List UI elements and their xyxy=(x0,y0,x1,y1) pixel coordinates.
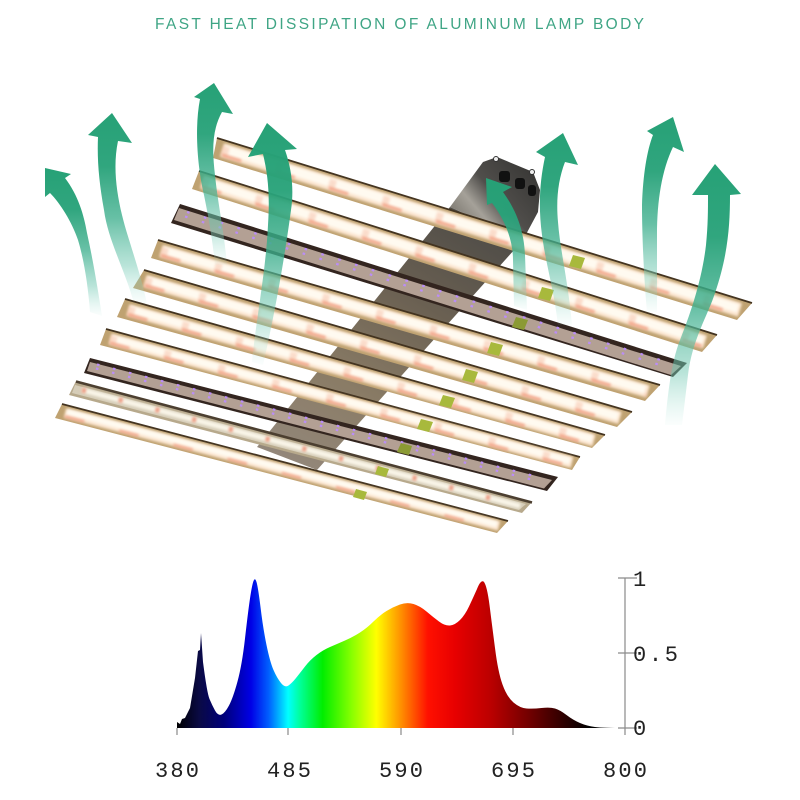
y axis labels: 0 xyxy=(633,717,646,742)
x axis labels: 695 xyxy=(491,759,535,784)
title: FAST HEAT DISSIPATION OF ALUMINUM LAMP BODY xyxy=(155,16,644,33)
lamp bar 9: white LED strip xyxy=(69,381,532,513)
arrow 2 xyxy=(88,113,147,304)
lamp bar 8: dark purple LED xyxy=(84,358,558,491)
lamp bar 10 xyxy=(55,404,508,533)
lamp bar 6 xyxy=(117,299,605,448)
arrow 7 xyxy=(642,117,684,312)
x axis labels: 380 xyxy=(155,759,199,784)
arrow 4 xyxy=(248,123,297,365)
x axis labels: 485 xyxy=(267,759,311,784)
connector box xyxy=(450,156,540,240)
x axis labels xyxy=(155,759,647,784)
arrow 5 xyxy=(486,178,527,310)
lamp bar 2 xyxy=(192,171,717,352)
lamp bar 7 xyxy=(100,329,580,470)
spectrum chart xyxy=(155,568,678,784)
x axis labels: 590 xyxy=(379,759,423,784)
y axis labels xyxy=(633,568,678,742)
arrow 8 xyxy=(665,164,741,425)
spectrum area xyxy=(177,579,625,728)
central aluminum spine xyxy=(257,207,523,470)
arrow 1 xyxy=(45,168,102,316)
y axis labels: 1 xyxy=(633,568,646,593)
arrow 3 xyxy=(194,83,233,265)
arrow 6 xyxy=(536,133,578,325)
lamp bar 3: dark purple LED xyxy=(171,204,687,377)
lamp bar 1 xyxy=(213,138,752,320)
lamp bar 5 xyxy=(133,270,632,427)
lamp bar 4 xyxy=(151,240,660,401)
y axis labels: 0.5 xyxy=(633,643,678,668)
x axis labels: 800 xyxy=(603,759,647,784)
axes xyxy=(177,578,637,735)
